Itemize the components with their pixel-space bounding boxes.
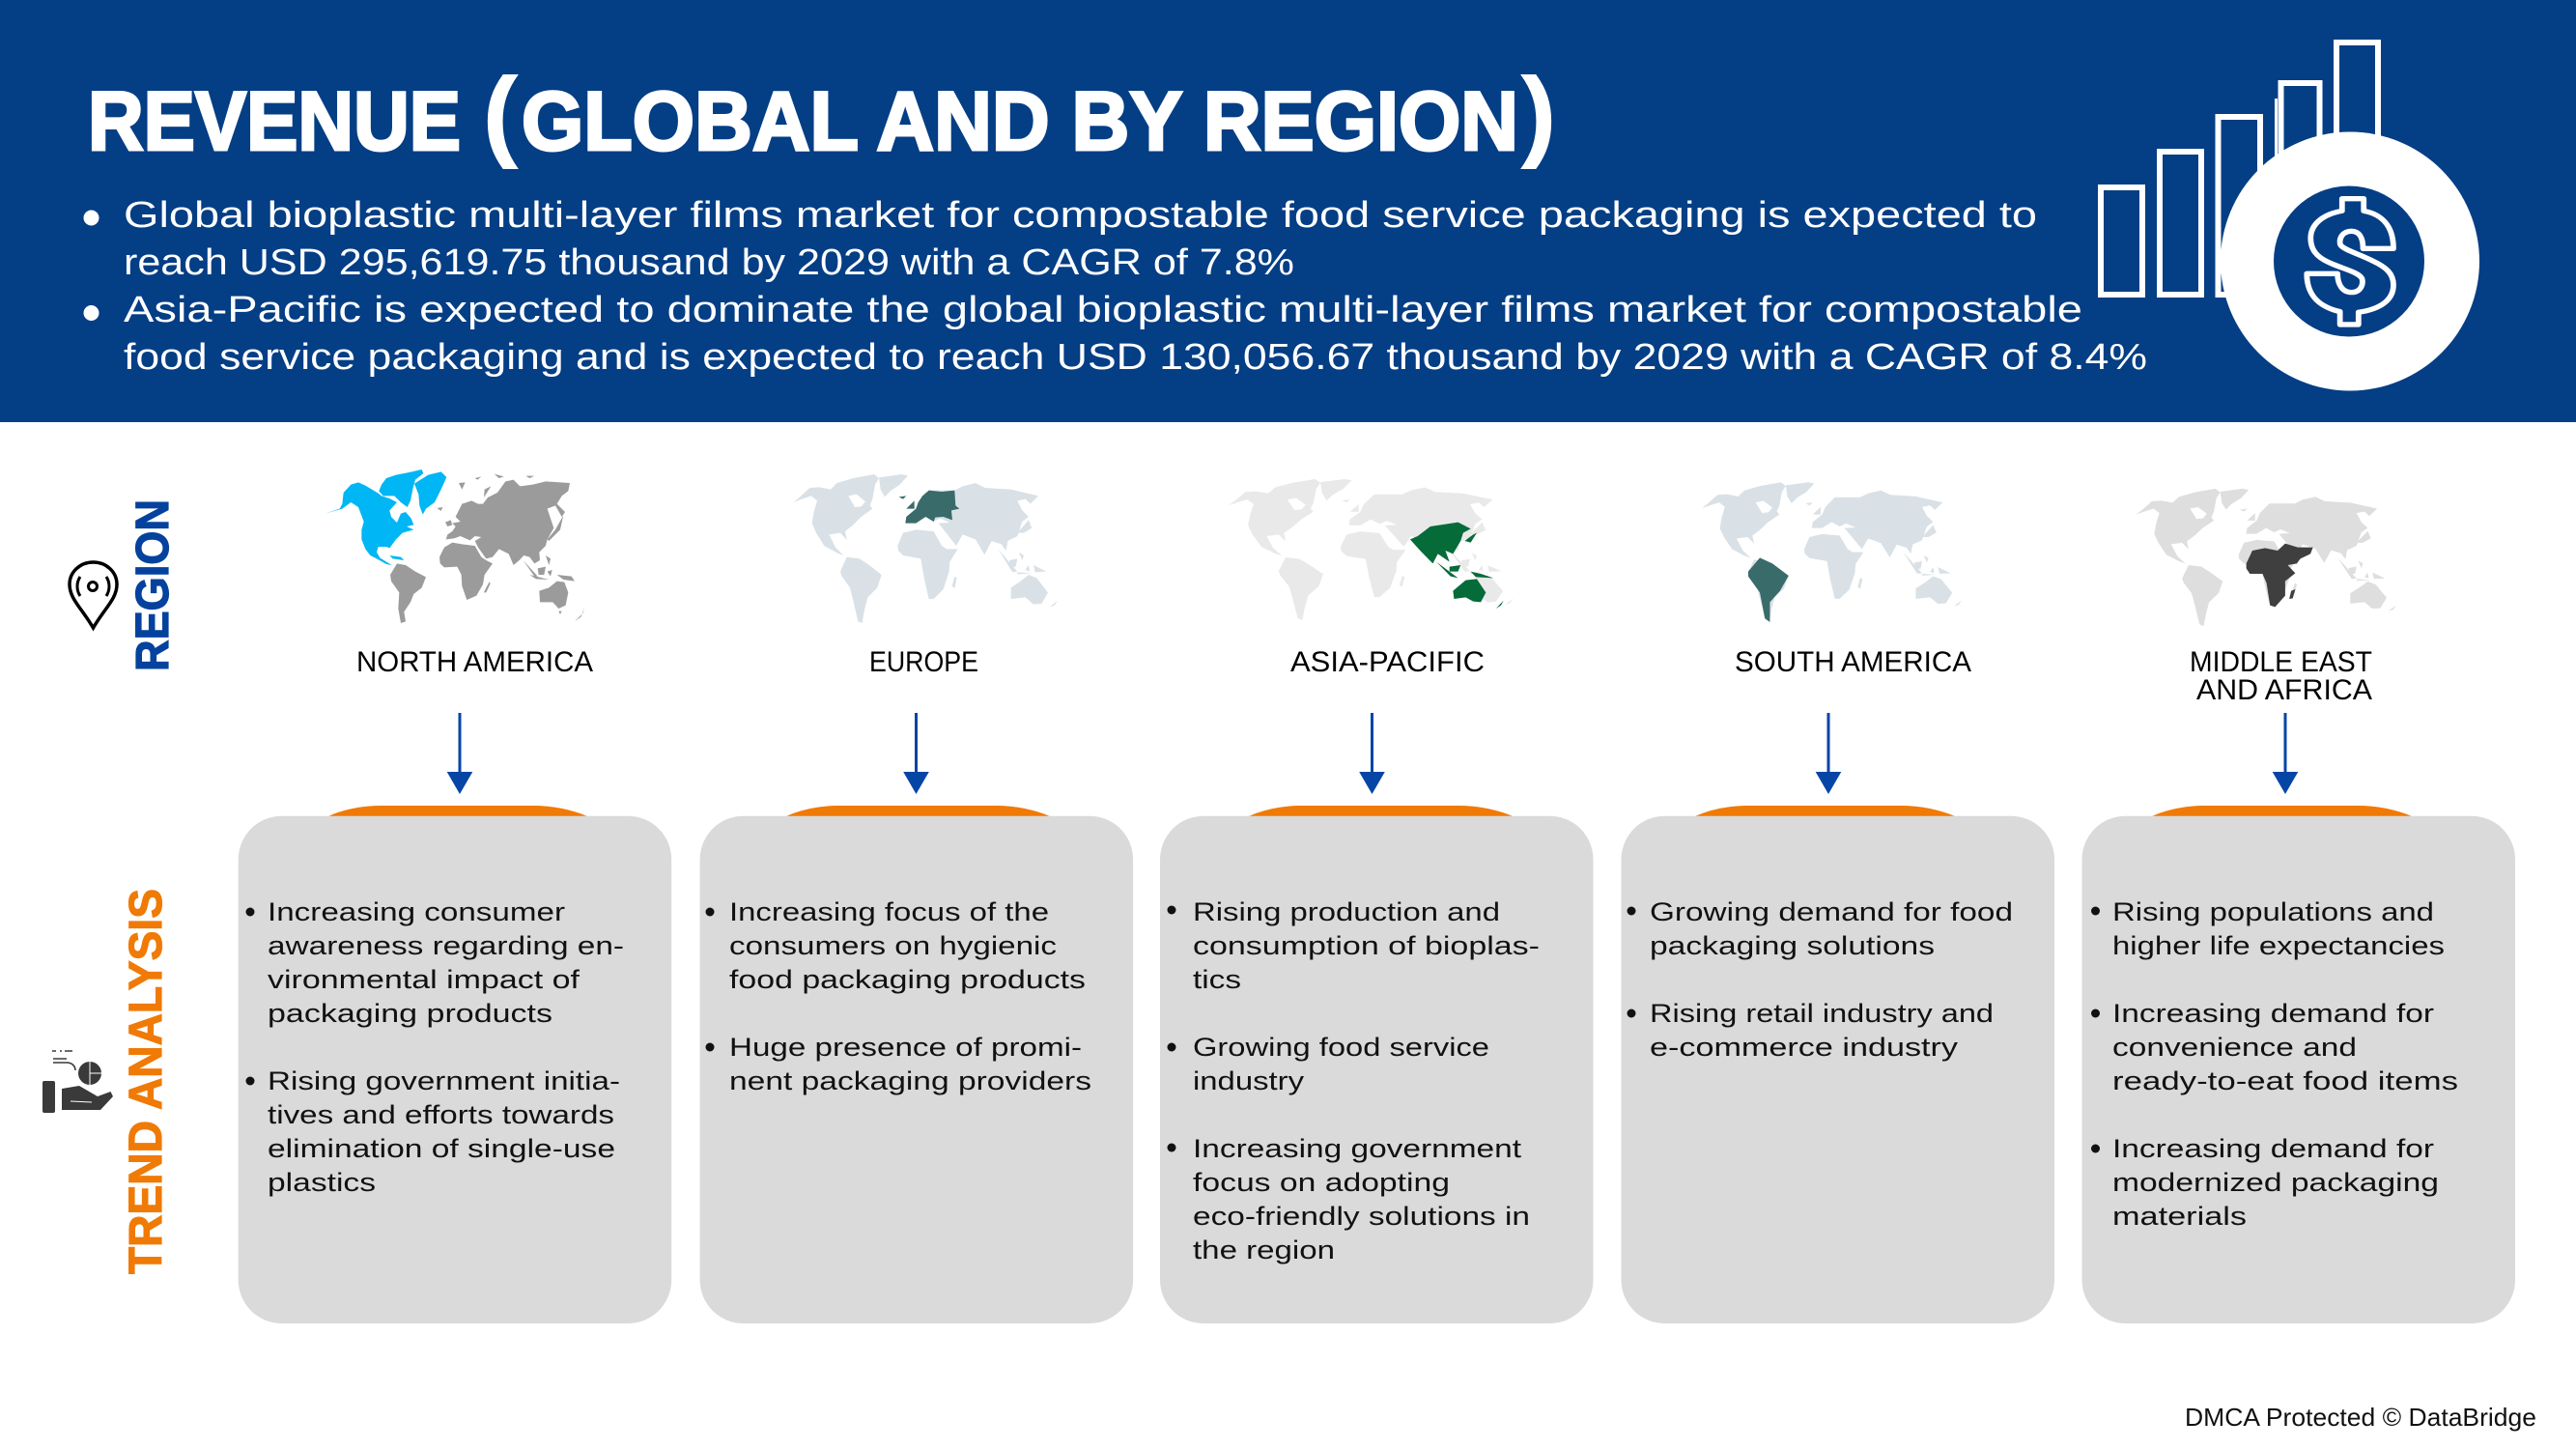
trend: convenience food: Increasing demand for xyxy=(2112,999,2434,1028)
title: ) xyxy=(1521,58,1556,170)
title: GLOBAL AND BY REGION xyxy=(522,75,1518,168)
bullet: global market summary: Global bioplastic multi-layer films market for compostable food service packaging is expected to xyxy=(124,195,2037,236)
trend: government eco-friendly focus: Increasing government xyxy=(1193,1134,1522,1163)
trend: consumer awareness: packaging products xyxy=(268,999,552,1028)
icon: hand holding pie chart xyxy=(42,1051,113,1113)
trend: packaging providers xyxy=(705,1033,1091,1095)
arrow: South America xyxy=(1816,713,1841,794)
footer credit: DMCA Protected © DataBridge xyxy=(2185,1403,2536,1432)
trend: bioplastics production: Rising production and xyxy=(1193,897,1500,926)
trend: packaging providers: nent packaging providers xyxy=(729,1066,1091,1095)
trend: food packaging demand xyxy=(1627,897,2013,960)
label: Middle East and Africa: AND AFRICA xyxy=(2196,674,2372,706)
icon: location pin xyxy=(70,562,117,628)
trend: retail and e-commerce: e-commerce industry xyxy=(1650,1033,1959,1062)
label: North America: NORTH AMERICA xyxy=(356,646,593,678)
bullet: Asia-Pacific summary: Asia-Pacific is expected to dominate the global bioplastic multi-layer films market for compostable xyxy=(124,290,2082,330)
title: REVENUE xyxy=(88,75,461,168)
trend: consumer awareness: vironmental impact of xyxy=(268,965,580,994)
trend: hygienic packaging: food packaging products xyxy=(729,965,1086,994)
bullet: global market summary xyxy=(83,195,2037,283)
trend: packaging providers: Huge presence of promi- xyxy=(729,1033,1082,1062)
trend: consumer awareness: Increasing consumer xyxy=(268,897,565,926)
trend: convenience food xyxy=(2091,999,2458,1095)
map: Middle East and Africa highlighted xyxy=(2137,489,2396,626)
label: Europe: EUROPE xyxy=(869,646,978,678)
trend: government eco-friendly focus xyxy=(1167,1134,1530,1264)
title xyxy=(88,58,1556,170)
trend: modernized packaging: materials xyxy=(2112,1202,2247,1231)
trend: consumer awareness xyxy=(245,897,624,1028)
trend: hygienic packaging xyxy=(705,897,1086,994)
trend: modernized packaging: modernized packaging xyxy=(2112,1168,2439,1197)
label: Middle East and Africa xyxy=(2190,646,2372,706)
trend: modernized packaging: Increasing demand for xyxy=(2112,1134,2434,1163)
map: Europe highlighted xyxy=(794,474,1058,623)
trend: government initiatives: plastics xyxy=(268,1168,376,1197)
trend: populations and life expectancy xyxy=(2091,897,2445,960)
trend: government eco-friendly focus: the region xyxy=(1193,1236,1335,1264)
panel: Europe trends xyxy=(700,806,1133,1323)
trend: bioplastics production: tics xyxy=(1193,965,1241,994)
trend: government initiatives: tives and efforts towards xyxy=(268,1100,614,1129)
arrow: North America xyxy=(447,713,472,794)
trend: populations and life expectancy: Rising populations and xyxy=(2112,897,2434,926)
icon: revenue bars with dollar coin xyxy=(2101,43,2479,390)
map: Asia-Pacific highlighted xyxy=(1229,479,1514,620)
panel: South America trends xyxy=(1621,806,2054,1323)
trend: food packaging demand: packaging solutions xyxy=(1650,931,1935,960)
trend: government eco-friendly focus: focus on adopting xyxy=(1193,1168,1450,1197)
trend: government initiatives: elimination of single-use xyxy=(268,1134,615,1163)
map: South America highlighted xyxy=(1702,482,1962,622)
bullet: Asia-Pacific summary: food service packaging and is expected to reach USD 130,056.67 thousand by 2029 with a CAGR of 8.4% xyxy=(124,337,2147,378)
trend: government eco-friendly focus: eco-friendly solutions in xyxy=(1193,1202,1530,1231)
arrow: Europe xyxy=(903,713,929,794)
trend: retail and e-commerce xyxy=(1627,999,1994,1062)
heading: trend analysis: TREND ANALYSIS xyxy=(121,889,172,1274)
panel: Asia-Pacific trends xyxy=(1160,806,1594,1323)
trend: government initiatives xyxy=(245,1066,620,1197)
panel: header banner xyxy=(0,0,2576,422)
trend: hygienic packaging: Increasing focus of the xyxy=(729,897,1049,926)
trend: populations and life expectancy: higher life expectancies xyxy=(2112,931,2445,960)
trend: convenience food: ready-to-eat food items xyxy=(2112,1066,2458,1095)
trend: convenience food: convenience and xyxy=(2112,1033,2357,1062)
trend: modernized packaging xyxy=(2091,1134,2439,1231)
label: South America: SOUTH AMERICA xyxy=(1735,646,1971,678)
arrow: Asia-Pacific xyxy=(1359,713,1385,794)
trend: food service: Growing food service xyxy=(1193,1033,1489,1062)
bullet: global market summary: reach USD 295,619.75 thousand by 2029 with a CAGR of 7.8% xyxy=(124,242,1294,283)
trend: retail and e-commerce: Rising retail industry and xyxy=(1650,999,1994,1028)
trend: food service: industry xyxy=(1193,1066,1305,1095)
trend: bioplastics production: consumption of bioplas- xyxy=(1193,931,1540,960)
label: Middle East and Africa: MIDDLE EAST xyxy=(2190,646,2372,678)
trend: government initiatives: Rising government initia- xyxy=(268,1066,620,1095)
trend: consumer awareness: awareness regarding en- xyxy=(268,931,624,960)
bullet: Asia-Pacific summary xyxy=(83,290,2147,378)
map: North America highlighted xyxy=(326,469,584,623)
trend: food packaging demand: Growing demand for food xyxy=(1650,897,2013,926)
label: Asia-Pacific: ASIA-PACIFIC xyxy=(1290,646,1485,678)
heading: region: REGION xyxy=(127,499,179,671)
panel: Middle East and Africa trends xyxy=(2082,806,2515,1323)
trend: hygienic packaging: consumers on hygienic xyxy=(729,931,1057,960)
trend: food service xyxy=(1167,1033,1489,1095)
title: ( xyxy=(483,58,518,170)
panel: North America trends xyxy=(239,806,671,1323)
trend: bioplastics production xyxy=(1167,897,1540,994)
arrow: Middle East and Africa xyxy=(2273,713,2298,794)
